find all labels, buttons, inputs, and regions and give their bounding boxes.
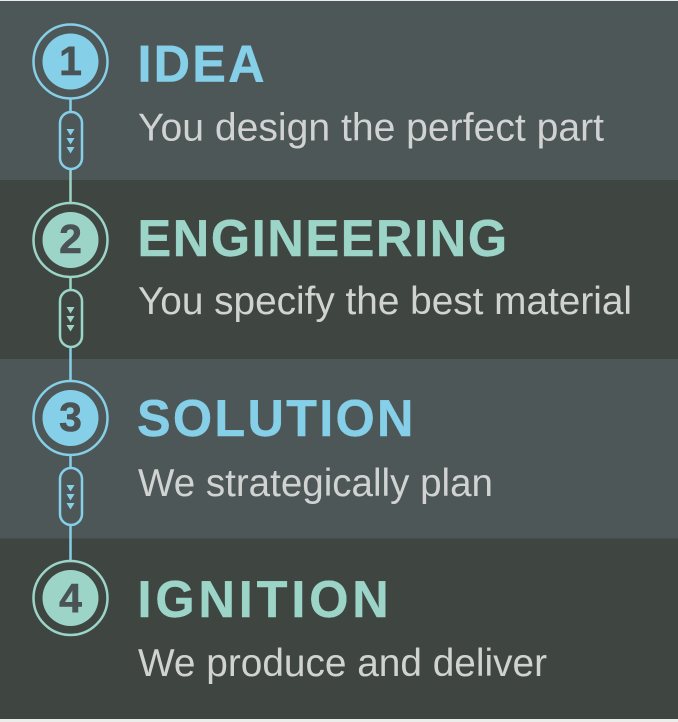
- icon: step 4 number badge: 4: [59, 575, 82, 621]
- heading: SOLUTION: SOLUTION: [137, 389, 413, 447]
- connector: step 3 to step 4: [60, 455, 82, 561]
- text: step 4 description: We produce and deliver: [138, 642, 547, 685]
- connector: step 1 to step 2: [60, 99, 82, 203]
- panel: step 2 background: [0, 180, 678, 359]
- heading: IGNITION: IGNITION: [138, 570, 389, 628]
- heading: ENGINEERING: ENGINEERING: [138, 209, 507, 267]
- panel: step 3 background: [0, 359, 678, 538]
- connector: step 2 to step 3: [60, 277, 82, 381]
- icon: step 1 number badge: [34, 24, 108, 98]
- text: step 1 description: You design the perfect part: [138, 106, 604, 150]
- panel: step 1 background: [0, 1, 678, 180]
- icon: step 3 number badge: [34, 381, 108, 455]
- text: step 3 description: We strategically plan: [138, 462, 493, 505]
- icon: step 3 number badge: 3: [59, 394, 82, 440]
- icon: step 2 number badge: [34, 203, 108, 277]
- text: step 2 description: You specify the best material: [138, 280, 632, 323]
- icon: step 1 number badge: 1: [59, 38, 82, 84]
- icon: step 2 number badge: 2: [59, 216, 82, 262]
- panel: step 4 background: [0, 538, 678, 719]
- icon: step 4 number badge: [34, 561, 108, 635]
- heading: IDEA: IDEA: [138, 35, 265, 93]
